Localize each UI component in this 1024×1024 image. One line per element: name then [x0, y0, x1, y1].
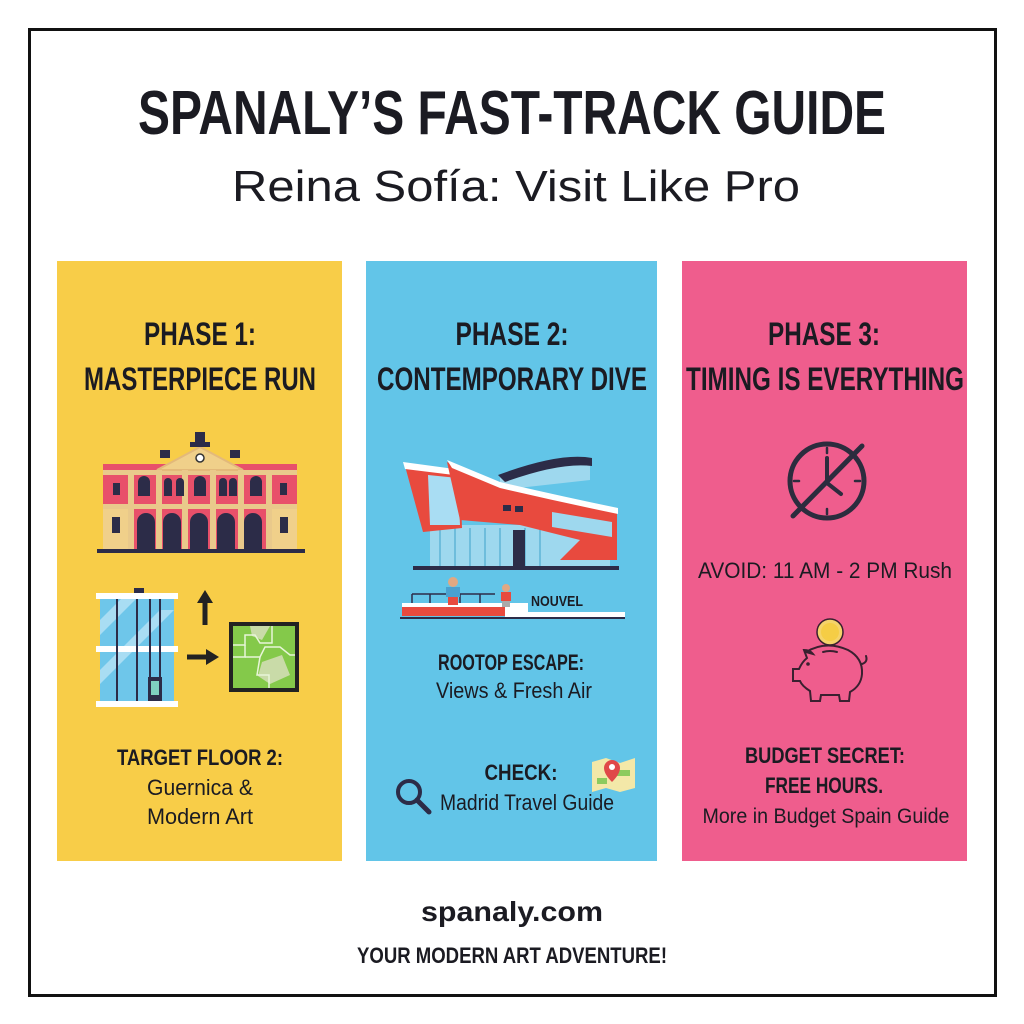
label: nouvel: NOUVEL	[531, 593, 583, 610]
text: budget secret: BUDGET SECRET:	[745, 743, 905, 768]
arrow: right	[187, 649, 219, 665]
heading: phase 1	[84, 316, 316, 397]
icon: floor map	[229, 622, 299, 692]
heading: phase 2	[377, 316, 647, 397]
heading: phase 3: PHASE 3:	[768, 316, 880, 352]
text: rooftop escape	[436, 650, 592, 703]
icon: rooftop platform	[400, 577, 625, 619]
panel: phase 2	[366, 261, 657, 861]
heading: phase 1: MASTERPIECE RUN	[84, 361, 316, 397]
subtitle: Reina Sofía: Visit Like Pro	[232, 162, 800, 211]
heading: phase 3	[686, 316, 964, 397]
text: rooftop escape: Views & Fresh Air	[436, 678, 592, 703]
text: budget secret	[702, 743, 950, 828]
panel: phase 3	[682, 261, 967, 861]
panel: phase 1	[57, 261, 342, 861]
text: check guide: Madrid Travel Guide	[440, 790, 614, 815]
footer: tagline: YOUR MODERN ART ADVENTURE!	[357, 943, 667, 968]
text: check guide: CHECK:	[484, 760, 558, 785]
heading: phase 1: PHASE 1:	[144, 316, 256, 352]
icon: museum building	[97, 432, 305, 553]
icon: crossed clock	[790, 444, 864, 518]
icon: nouvel building	[403, 457, 619, 570]
icon: map pin	[592, 758, 635, 792]
footer: website: spanaly.com	[421, 896, 603, 927]
icon: piggy bank	[793, 619, 866, 701]
text: rooftop escape: ROOTOP ESCAPE:	[438, 650, 584, 675]
icon: magnifier	[398, 781, 429, 812]
text: avoid rush: AVOID: 11 AM - 2 PM Rush	[698, 558, 952, 583]
text: target floor: Modern Art	[147, 804, 253, 829]
text: check guide	[440, 760, 614, 815]
text: budget secret: FREE HOURS.	[765, 773, 883, 798]
icon: elevator	[96, 588, 178, 707]
text: budget secret: More in Budget Spain Guide	[702, 805, 950, 828]
text: target floor: Guernica &	[147, 775, 253, 800]
heading: phase 2: PHASE 2:	[456, 316, 568, 352]
arrow: up	[197, 590, 213, 625]
text: target floor: TARGET FLOOR 2:	[117, 745, 283, 770]
text: target floor	[117, 745, 283, 829]
heading: phase 2: CONTEMPORARY DIVE	[377, 361, 647, 397]
